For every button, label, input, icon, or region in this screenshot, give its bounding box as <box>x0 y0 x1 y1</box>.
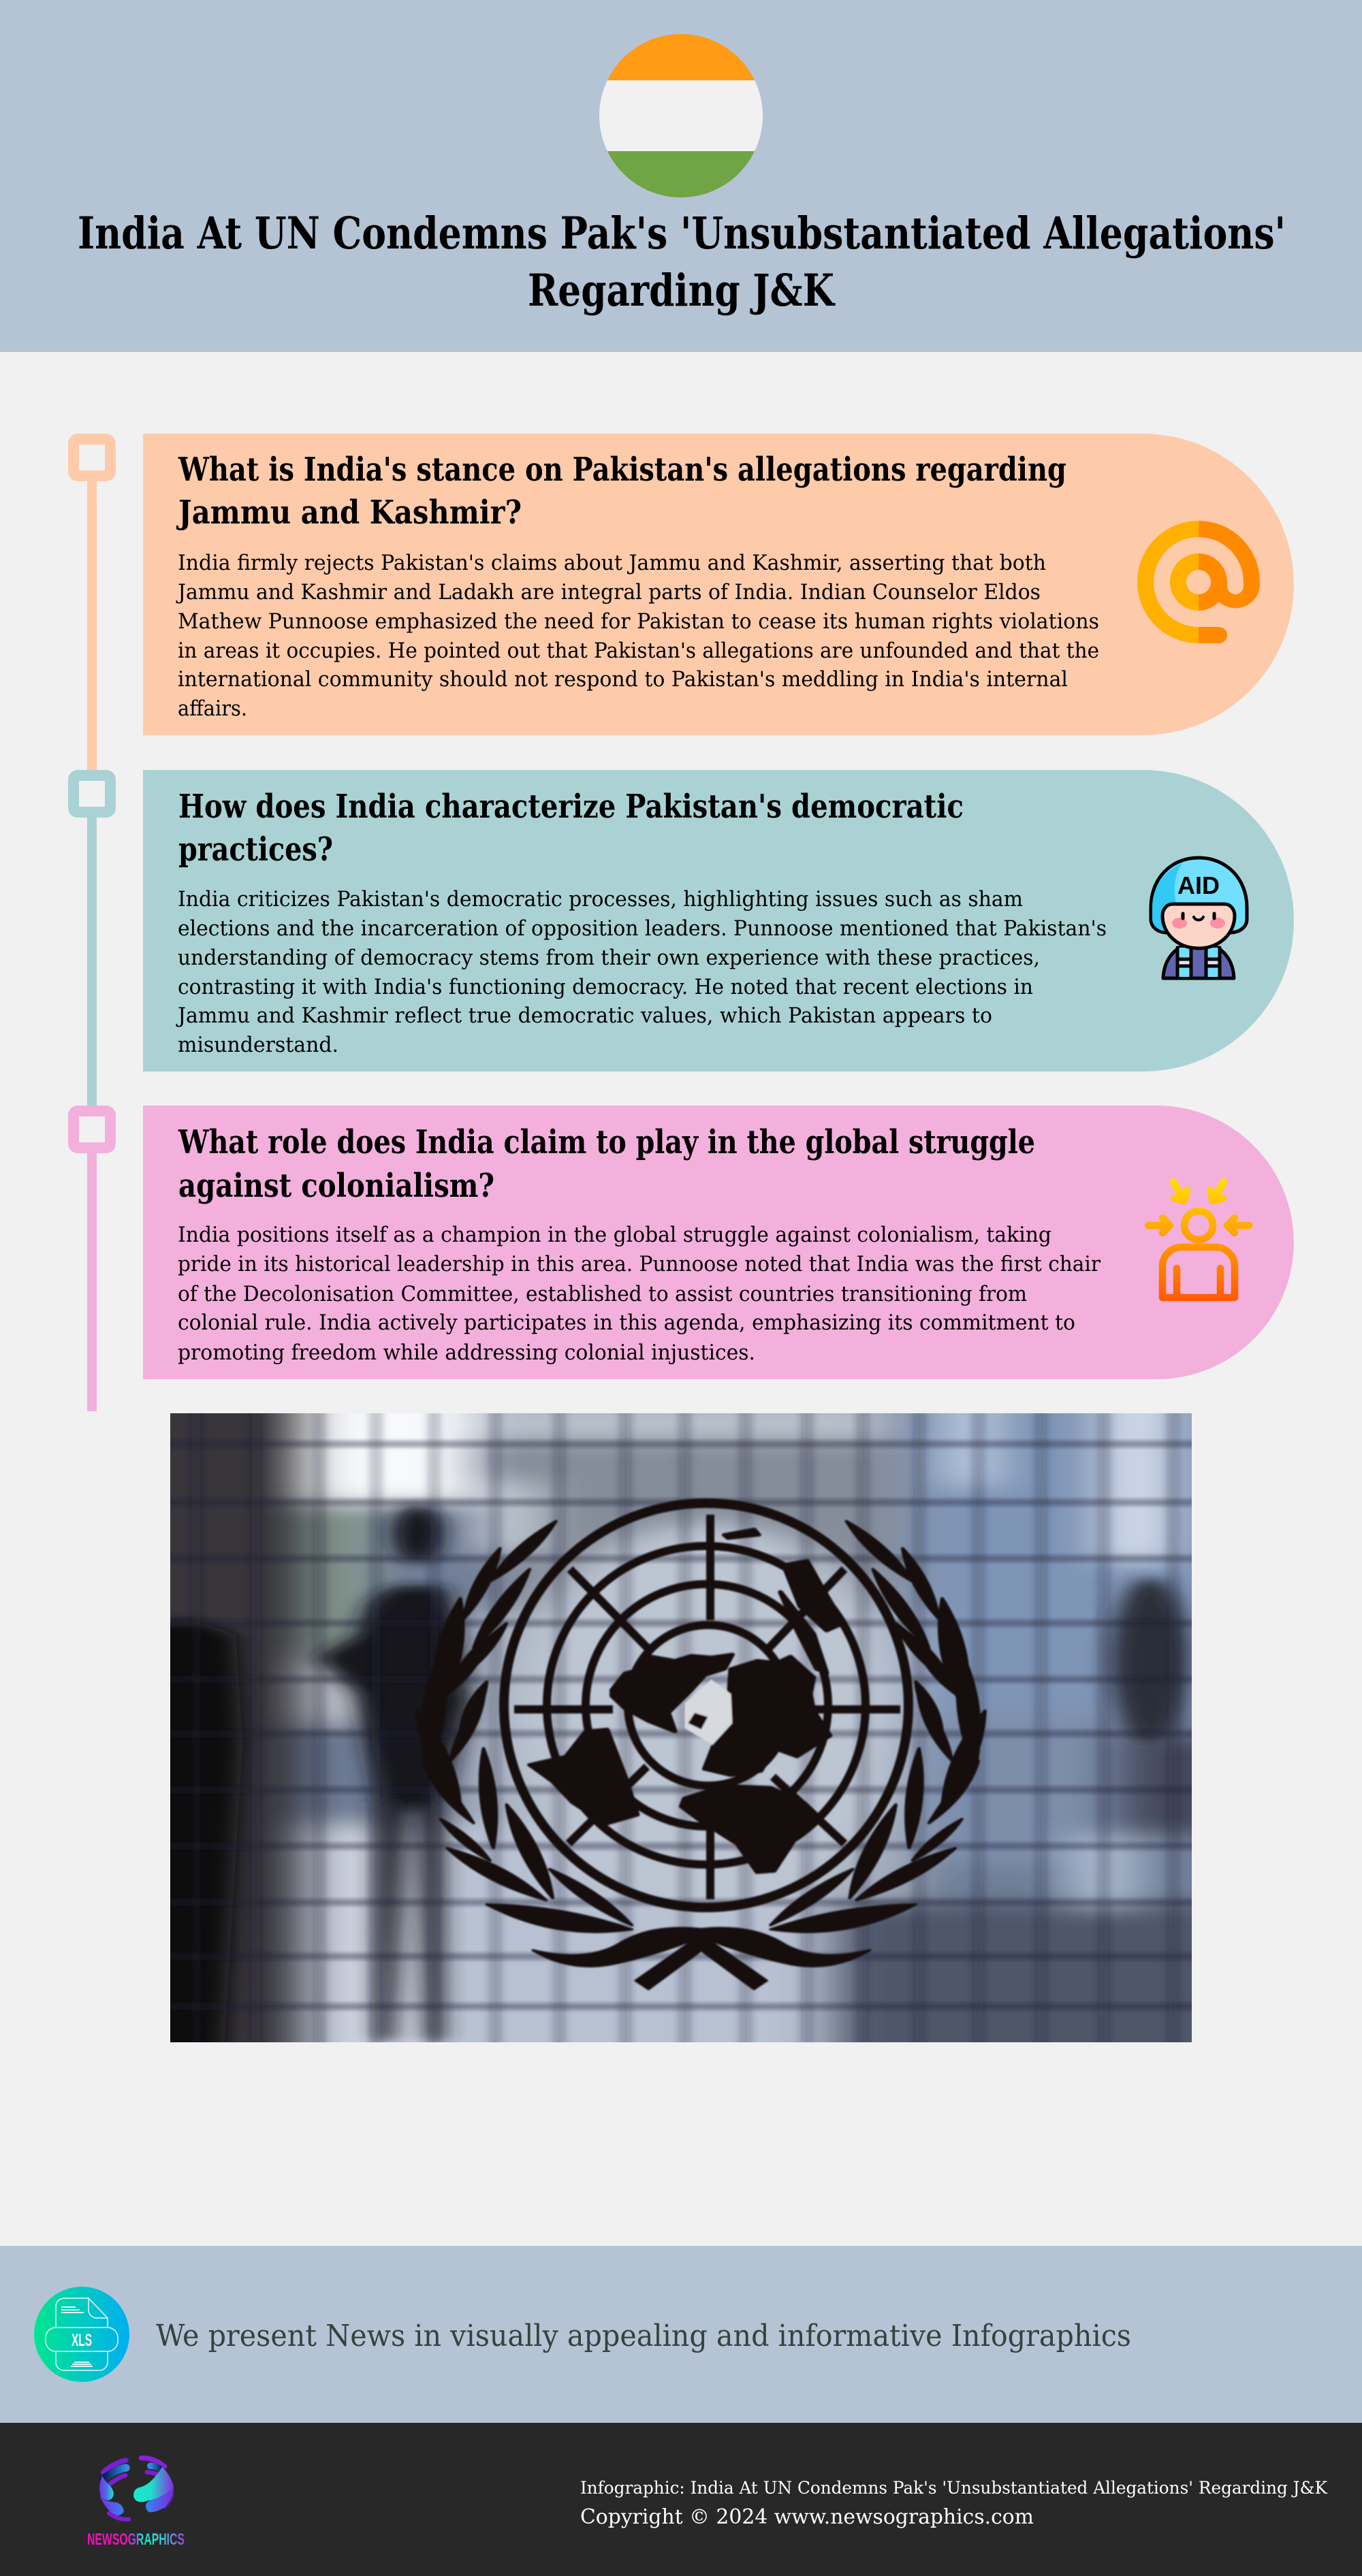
heading <box>178 788 964 869</box>
card background <box>143 770 1294 1072</box>
heading: What is India's stance on Pakistan's allegations regarding <box>178 451 1066 489</box>
heading: against colonialism? <box>178 1167 494 1205</box>
icon: aid worker <box>1151 858 1247 978</box>
card background <box>143 434 1294 735</box>
heading: How does India characterize Pakistan's democratic <box>178 788 964 826</box>
body text: understanding of democracy stems from their own experience with these practices, <box>178 946 1040 970</box>
timeline: card 2 node and stem <box>68 770 116 1110</box>
body text: in areas it occupies. He pointed out that Pakistan's allegations are unfounded and that the <box>178 639 1099 663</box>
footer title line: Infographic: India At UN Condemns Pak's 'Unsubstantiated Allegations' Regarding J&K <box>580 2478 1328 2498</box>
body text: India criticizes Pakistan's democratic processes, highlighting issues such as sham <box>178 887 1023 912</box>
timeline: card 3 node and stem <box>68 1106 116 1411</box>
icon: India flag circle <box>599 34 763 197</box>
body text: misunderstand. <box>178 1033 338 1057</box>
photo background <box>170 1413 1192 2042</box>
body text <box>178 1223 1100 1365</box>
icon: at sign <box>1137 521 1260 643</box>
body text: India positions itself as a champion in the global struggle against colonialism, taking <box>178 1223 1051 1247</box>
photo: UN emblem on glass <box>170 1413 1192 2042</box>
body text: pride in its historical leadership in this area. Punnoose noted that India was the first chair <box>178 1252 1100 1276</box>
icon label: XLS: XLS <box>72 2331 92 2350</box>
body text: promoting freedom while addressing colonial injustices. <box>178 1340 755 1365</box>
body text: affairs. <box>178 696 247 721</box>
heading <box>178 1123 1035 1205</box>
footer copyright line: Copyright © 2024 www.newsographics.com <box>580 2505 1034 2529</box>
tagline text: We present News in visually appealing and informative Infographics <box>156 2319 1131 2353</box>
UN emblem <box>417 1503 985 1989</box>
heading: What role does India claim to play in the global struggle <box>178 1123 1035 1161</box>
logo: Newsographics <box>87 2458 185 2549</box>
body text <box>176 887 1107 1057</box>
heading <box>176 451 1066 532</box>
continents and wreath <box>417 1521 985 1989</box>
body text: elections and the incarceration of opposition leaders. Punnoose mentioned that Pakistan's <box>178 916 1107 941</box>
icon: XLS file <box>34 2287 129 2382</box>
panel: India's stance <box>143 434 1294 735</box>
heading: Jammu and Kashmir? <box>176 494 522 532</box>
footer band <box>0 2423 1362 2576</box>
body text: Jammu and Kashmir and Ladakh are integral parts of India. Indian Counselor Eldos <box>176 580 1041 605</box>
title: Regarding J&K <box>528 265 836 317</box>
body text: of the Decolonisation Committee, established to assist countries transitioning from <box>178 1282 1027 1306</box>
body text: contrasting it with India's functioning democracy. He noted that recent elections in <box>178 975 1033 999</box>
body text <box>176 551 1099 721</box>
heading: practices? <box>178 831 333 869</box>
icon label: AID: AID <box>1177 871 1220 899</box>
header panel <box>0 0 1362 352</box>
body text: colonial rule. India actively participates in this agenda, emphasizing its commitment to <box>178 1310 1075 1335</box>
body text: international community should not respond to Pakistan's meddling in India's internal <box>178 667 1068 692</box>
globe rings and spokes <box>504 1503 908 1907</box>
tagline band <box>0 2246 1362 2423</box>
panel: struggle against colonialism <box>143 1106 1294 1379</box>
logo wordmark: NEWSOGRAPHICS <box>87 2530 185 2549</box>
timeline: card 1 node and stem <box>68 434 116 773</box>
card background <box>143 1106 1294 1379</box>
icon: person with arrows <box>1148 1182 1249 1298</box>
body text: Jammu and Kashmir reflect true democratic values, which Pakistan appears to <box>176 1003 992 1028</box>
body text: Mathew Punnoose emphasized the need for Pakistan to cease its human rights violations <box>178 609 1099 634</box>
body text: India firmly rejects Pakistan's claims about Jammu and Kashmir, asserting that both <box>178 551 1046 575</box>
panel: democratic practices <box>143 770 1294 1072</box>
title <box>78 208 1286 317</box>
